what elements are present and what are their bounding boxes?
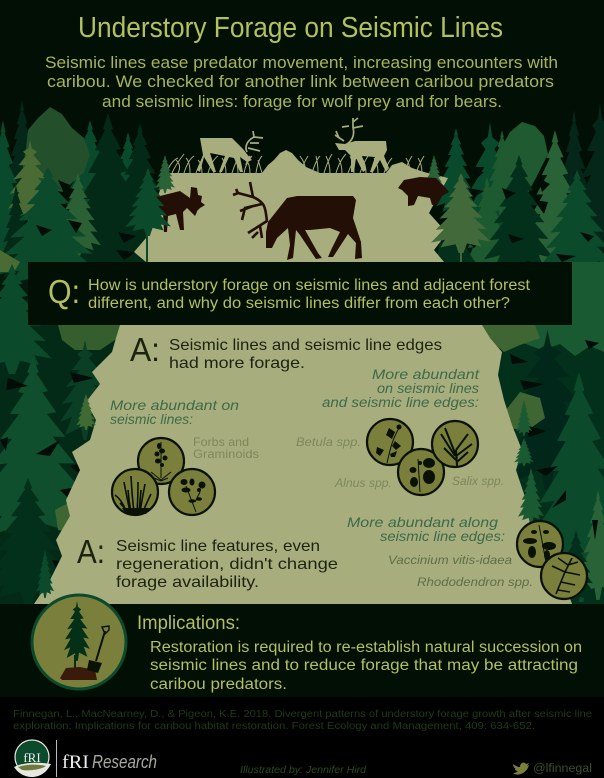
implications band xyxy=(0,604,604,697)
forest: left and right tree lines xyxy=(0,100,604,606)
label: salix: Salix spp. xyxy=(452,474,504,488)
answer 2 text: forage availability. xyxy=(116,574,259,591)
label: vaccinium: Vaccinium vitis-idaea xyxy=(388,553,512,567)
logo: fRI Research: Research xyxy=(92,752,157,772)
heading: more abundant on seismic lines xyxy=(110,397,239,427)
heading: more abundant along edges: seismic line edges: xyxy=(380,528,505,544)
icon: vaccinium xyxy=(517,521,563,567)
intro text: Seismic lines ease predator movement, increasing encounters with xyxy=(45,54,558,72)
upper right far trees xyxy=(436,122,518,272)
small trees at clearing edges xyxy=(36,155,544,598)
title: Understory Forage on Seismic Lines xyxy=(78,12,503,44)
question text: different, and why do seismic lines differ from each other? xyxy=(88,295,510,312)
citation: exploration: Implications for caribou habitat restoration. Forest Ecology and Management, 409: 634-652. xyxy=(13,721,535,732)
dark gaps between trees xyxy=(0,170,599,568)
intro text: and seismic lines: forage for wolf prey and for bears. xyxy=(102,93,502,111)
answer 1 text: Seismic lines and seismic line edges xyxy=(169,337,442,354)
logo: fRI Research: fRI xyxy=(23,750,41,765)
grass along the ridge xyxy=(166,152,424,173)
heading: more abundant along edges xyxy=(347,514,505,544)
lower left trees xyxy=(0,300,130,604)
icon: rhododendron xyxy=(541,553,587,599)
citation: Finnegan, L., MacNearney, D., & Pigeon, K.E. 2018. Divergent patterns of understory forage growth after seismic line xyxy=(13,709,592,720)
answer 2 text xyxy=(116,538,338,591)
large caribou, grazing xyxy=(233,182,362,260)
logo: fRI Research: fRI xyxy=(62,752,89,773)
icon: alnus xyxy=(398,449,444,495)
standing caribou, pale, right xyxy=(335,118,389,172)
footer background xyxy=(0,697,604,778)
icon: betula xyxy=(367,419,413,465)
citation xyxy=(13,709,592,732)
twitter handle: @lfinnegal xyxy=(533,763,592,775)
answer 1: A: xyxy=(130,331,160,368)
implications text: seismic lines and to reduce forage that may be attracting xyxy=(150,657,578,674)
answer 2 xyxy=(77,533,338,591)
answer 2 text: Seismic line features, even xyxy=(116,538,320,555)
Q mark: Q: xyxy=(48,273,80,310)
grazing caribou, pale, left xyxy=(197,131,263,172)
intro text xyxy=(45,54,558,111)
question text xyxy=(88,277,531,312)
label: rhododendron: Rhododendron spp. xyxy=(417,575,533,589)
heading: more abundant on lines and edges: on seismic lines xyxy=(377,380,479,396)
logo: fRI Research xyxy=(14,740,157,777)
label: forbs and graminoids xyxy=(193,435,259,461)
question text: How is understory forage on seismic lines and adjacent forest xyxy=(88,277,531,294)
answer 1 xyxy=(130,331,442,372)
lower right trees xyxy=(480,300,604,604)
label: alnus: Alnus spp. xyxy=(334,476,392,490)
label: forbs and graminoids: Graminoids xyxy=(193,447,259,461)
heading: more abundant along edges: More abundant along xyxy=(347,514,498,530)
icon: salix xyxy=(432,421,478,467)
icon: tree and shovel medallion xyxy=(32,595,126,689)
icon: forb xyxy=(138,438,184,484)
label: betula: Betula spp. xyxy=(296,435,361,449)
icon: twitter bird xyxy=(513,763,529,775)
answer 1 text: had more forage. xyxy=(169,355,305,372)
heading: more abundant on seismic lines: More abundant on xyxy=(110,397,239,413)
implications text: Restoration is required to re-establish natural succession on xyxy=(150,639,582,656)
clearing: upper seismic line xyxy=(134,150,448,262)
trees in front of the animals xyxy=(125,168,491,262)
intro text: caribou. We checked for another link between caribou predators xyxy=(47,73,554,91)
heading: more abundant on lines and edges: More abundant xyxy=(372,366,480,382)
implications text: caribou predators. xyxy=(150,676,287,693)
moose xyxy=(156,187,205,232)
upper left far trees xyxy=(0,120,148,270)
illustrator credit: Illustrated by: Jennifer Hird xyxy=(240,765,366,776)
question panel xyxy=(28,262,572,325)
bear xyxy=(398,177,449,206)
label: forbs and graminoids: Forbs and xyxy=(193,435,249,449)
answer 2 text: regeneration, didn't change xyxy=(116,556,338,573)
heading: more abundant on seismic lines: seismic lines: xyxy=(110,411,193,427)
heading: more abundant on lines and edges: and seismic line edges: xyxy=(322,394,479,410)
heading: more abundant on lines and edges xyxy=(322,366,480,410)
icon: grass xyxy=(112,469,158,515)
clearing: lower seismic line xyxy=(34,325,572,604)
answer 1 text xyxy=(169,337,442,372)
answer 2: A: xyxy=(77,533,105,570)
implications heading: Implications: xyxy=(137,613,240,634)
implications text xyxy=(150,639,582,693)
icon: clover xyxy=(169,469,215,515)
